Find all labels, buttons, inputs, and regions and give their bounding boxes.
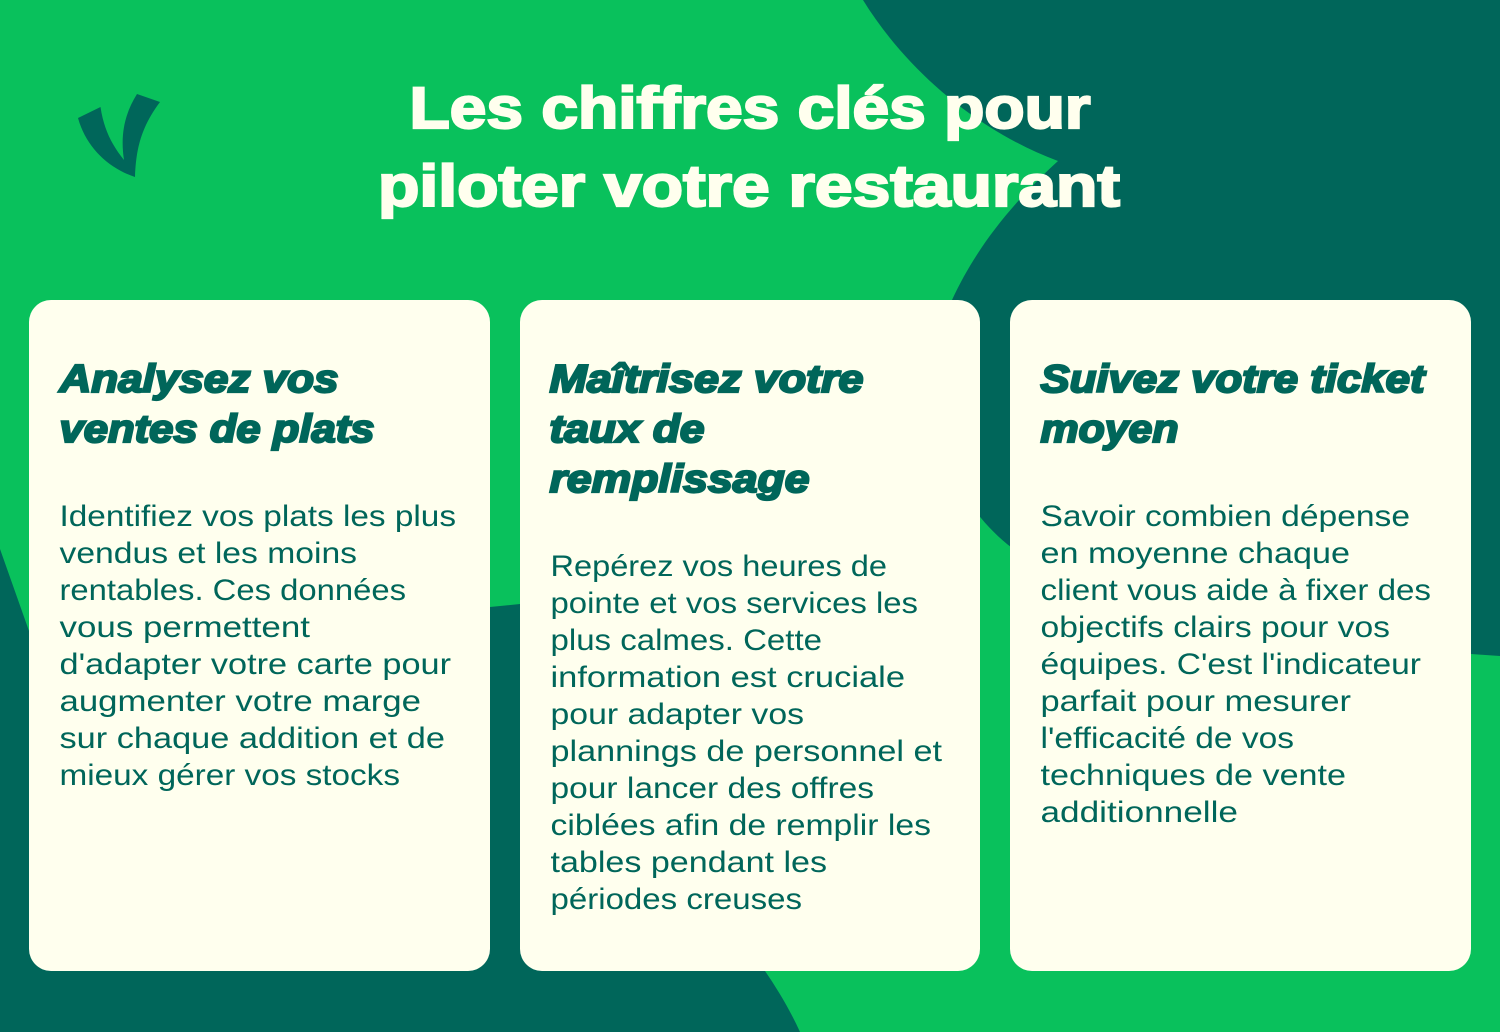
heading 1: Analysez vos <box>58 358 338 401</box>
body text 3: additionnelle <box>1040 796 1238 829</box>
heading 1: ventes de plats <box>60 408 374 451</box>
body text 1: augmenter votre marge <box>60 685 421 718</box>
body text 1: rentables. Ces données <box>60 574 406 607</box>
body text 2: information est cruciale <box>550 661 905 694</box>
body text 3: en moyenne chaque <box>1040 537 1350 570</box>
heading 1 <box>58 358 374 451</box>
body text 2: plus calmes. Cette <box>550 624 822 657</box>
heading 3: moyen <box>1040 408 1178 451</box>
panel: analysez vos ventes de plats <box>29 300 490 971</box>
body text 2: pour adapter vos <box>550 698 804 731</box>
body text 1 <box>60 500 456 792</box>
body text 2: périodes creuses <box>550 883 802 916</box>
body text 3: techniques de vente <box>1040 759 1346 792</box>
body text 2: pour lancer des offres <box>550 772 874 805</box>
body text 3 <box>1040 500 1431 829</box>
body text 1: mieux gérer vos stocks <box>60 759 400 792</box>
background: dark blob bottom left <box>0 549 800 1032</box>
card background 1 <box>29 300 490 971</box>
body text 3: Savoir combien dépense <box>1040 500 1410 533</box>
body text 3: client vous aide à fixer des <box>1040 574 1431 607</box>
heading 3: Suivez votre ticket <box>1040 358 1427 401</box>
title: piloter votre restaurant <box>378 154 1120 219</box>
panel: maîtrisez votre taux de remplissage <box>520 300 980 971</box>
body text 1: vous permettent <box>60 611 311 644</box>
heading 2: taux de <box>550 408 704 451</box>
card background 3 <box>1010 300 1471 971</box>
body text 2: plannings de personnel et <box>550 735 943 768</box>
body text 3: objectifs clairs pour vos <box>1040 611 1390 644</box>
body text 2: Repérez vos heures de <box>550 550 887 583</box>
heading 2: Maîtrisez votre <box>550 358 864 401</box>
body text 2: ciblées afin de remplir les <box>550 809 931 842</box>
title <box>378 76 1120 219</box>
body text 1: sur chaque addition et de <box>60 722 445 755</box>
body text 3: équipes. C'est l'indicateur <box>1040 648 1421 681</box>
icon: logo check mark <box>78 94 160 177</box>
heading 2: remplissage <box>550 458 810 501</box>
body text 3: l'efficacité de vos <box>1040 722 1294 755</box>
body text 1: vendus et les moins <box>60 537 357 570</box>
heading 2 <box>550 358 864 501</box>
body text 2: pointe et vos services les <box>550 587 918 620</box>
card background 2 <box>520 300 980 971</box>
body text 2 <box>550 550 943 916</box>
heading 3 <box>1040 358 1427 451</box>
body text 2: tables pendant les <box>550 846 827 879</box>
body text 1: Identifiez vos plats les plus <box>60 500 456 533</box>
background: dark blob top right <box>863 0 1500 656</box>
title: Les chiffres clés pour <box>410 76 1090 141</box>
body text 1: d'adapter votre carte pour <box>60 648 451 681</box>
body text 3: parfait pour mesurer <box>1040 685 1351 718</box>
panel: suivez votre ticket moyen <box>1010 300 1471 971</box>
